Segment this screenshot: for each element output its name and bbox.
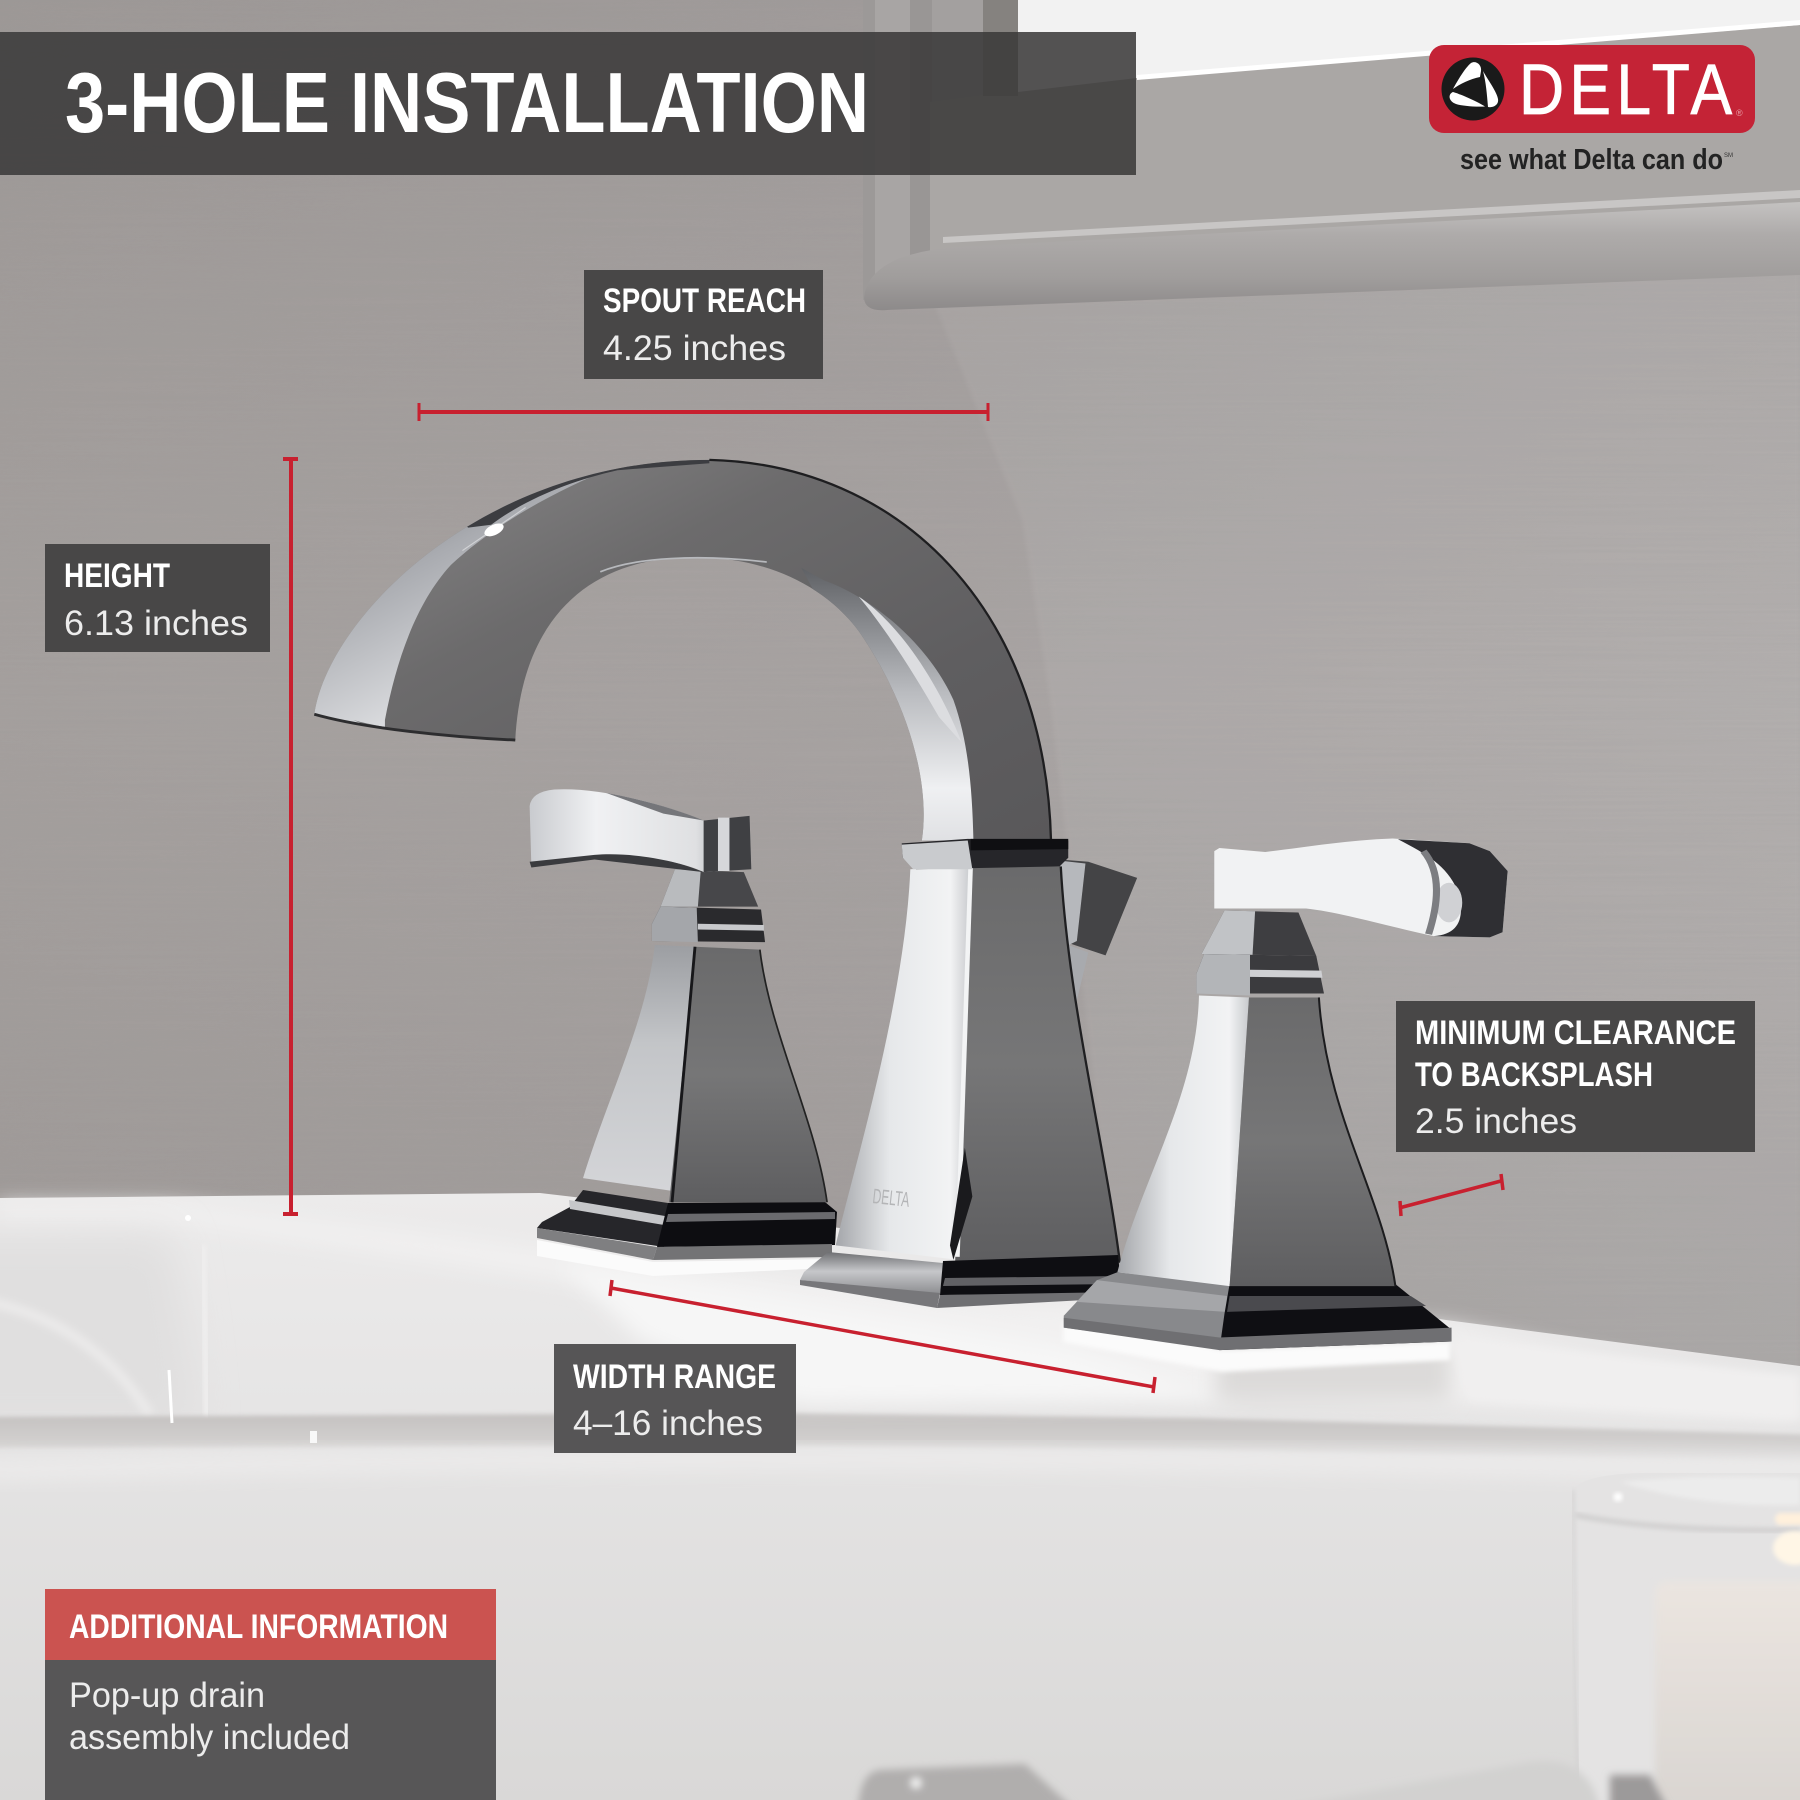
value: 6.13 inches: [64, 604, 248, 643]
panel body: [45, 1660, 496, 1800]
left handle foot: [537, 1190, 837, 1260]
body line 2: assembly included: [69, 1718, 350, 1757]
value: 2.5 inches: [1415, 1102, 1577, 1141]
value: 4–16 inches: [573, 1404, 763, 1443]
background: blurred objects on counter: [858, 1761, 1668, 1800]
wordmark: DELTA: [1519, 50, 1737, 130]
arrow: width range dimension line: [610, 1280, 1155, 1393]
registered mark: ®: [1736, 108, 1743, 118]
left handle body, collar and lever: [530, 789, 827, 1202]
center foot: [800, 1252, 1122, 1308]
background: bathroom wall: [0, 0, 1800, 1400]
heading: ADDITIONAL INFORMATION: [69, 1608, 448, 1646]
arrow: spout reach dimension line: [419, 403, 988, 421]
callout: width range: [554, 1344, 796, 1453]
body: [836, 839, 1120, 1263]
arrow: clearance dimension line: [1399, 1174, 1503, 1216]
icon: left handle: [530, 789, 837, 1260]
callout: spout reach: [584, 270, 823, 379]
tagline: see what Delta can do: [1460, 144, 1723, 176]
title bar: [0, 32, 1136, 175]
panel: additional information: [45, 1589, 496, 1800]
label line 2: TO BACKSPLASH: [1415, 1056, 1653, 1094]
base logo text: DELTA: [871, 1185, 911, 1212]
background: blurred candle in glass: [1573, 1473, 1800, 1800]
body line 1: Pop-up drain: [69, 1676, 265, 1715]
background: white sink counter: [0, 1193, 1800, 1800]
icon: central faucet spout and body: [302, 453, 1137, 1308]
spout: [302, 453, 1051, 843]
label: SPOUT REACH: [603, 282, 806, 320]
lift rod: [1060, 860, 1137, 1010]
panel heading bar: [45, 1589, 496, 1660]
icon: right handle: [1064, 839, 1508, 1350]
label: WIDTH RANGE: [573, 1358, 776, 1396]
icon: Delta triangle mark: [1442, 58, 1504, 120]
callout: minimum clearance to backsplash: [1396, 1001, 1755, 1152]
callout: height: [45, 544, 270, 652]
logo: Delta: [1429, 45, 1755, 176]
title: 3-HOLE INSTALLATION: [65, 56, 869, 151]
arrow: height dimension line: [283, 458, 298, 1214]
label: HEIGHT: [64, 557, 170, 595]
label: MINIMUM CLEARANCE: [1415, 1014, 1736, 1052]
value: 4.25 inches: [603, 329, 786, 368]
background: window and mirror frame: [863, 0, 1800, 310]
service mark: SM: [1724, 153, 1733, 159]
